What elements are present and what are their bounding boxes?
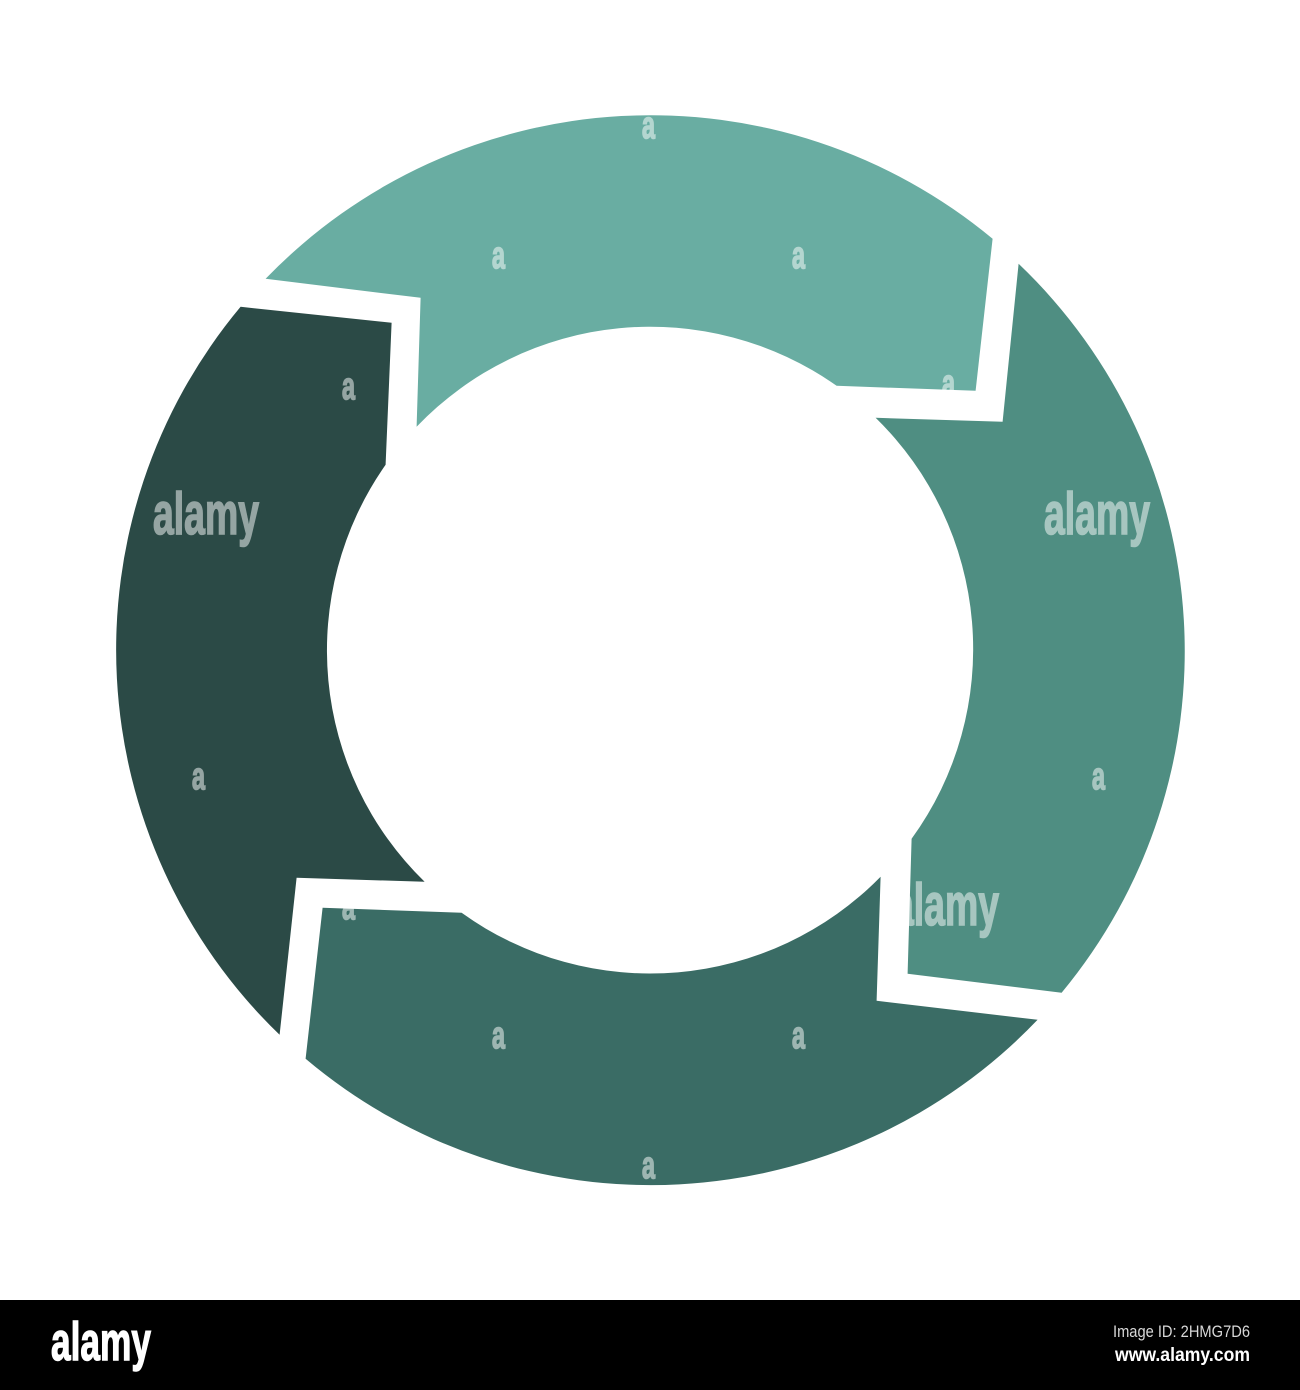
watermarks: a [942, 363, 956, 405]
arrow segment: top, light teal [266, 115, 993, 427]
website: www.alamy.com [1114, 1345, 1250, 1366]
footer logo: alamy [51, 1312, 151, 1372]
image id: Image ID: 2HMG7D6 [1113, 1322, 1250, 1341]
watermarks: a [792, 235, 806, 277]
watermarks: a [342, 366, 356, 408]
footer bar [0, 1300, 1300, 1390]
watermarks: alamy [1044, 481, 1150, 547]
arrow segment: bottom, dark teal [306, 877, 1038, 1185]
arrow segment: right, medium teal [876, 264, 1185, 993]
watermarks: a [492, 235, 506, 277]
watermarks: a [342, 886, 356, 928]
watermarks: a [492, 1015, 506, 1057]
arrow segment: left, darkest teal [116, 307, 425, 1035]
watermarks [153, 105, 1150, 1187]
watermarks: alamy [893, 872, 999, 938]
watermarks: a [642, 1145, 656, 1187]
watermarks: alamy [153, 481, 259, 547]
watermarks: a [642, 105, 656, 147]
watermarks: a [192, 756, 206, 798]
watermarks: a [792, 1015, 806, 1057]
watermarks: a [1092, 756, 1106, 798]
